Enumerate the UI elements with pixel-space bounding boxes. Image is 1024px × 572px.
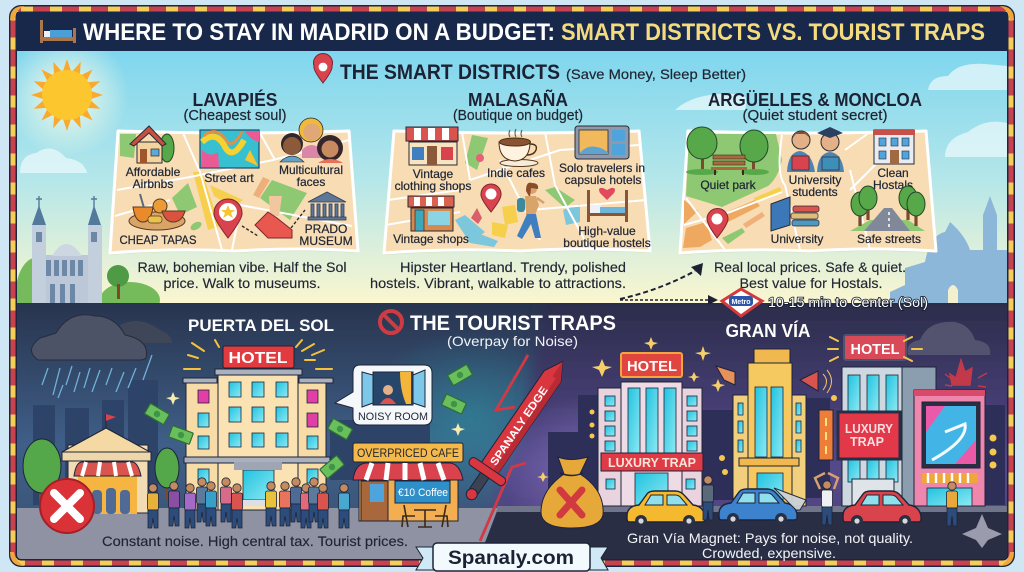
- label: Safe streets: [857, 232, 921, 246]
- label: faces: [297, 175, 325, 189]
- icon: metro sign: Metro: [731, 299, 751, 306]
- label: boutique hostels: [563, 236, 651, 250]
- district: Puerta del Sol: [23, 315, 473, 549]
- building: yellow tower: [733, 349, 806, 506]
- description: Raw, bohemian vibe. Half the Sol: [138, 259, 346, 275]
- clouds: [20, 64, 1007, 173]
- icon: books: [771, 197, 819, 231]
- icon: vintage shop: [408, 196, 454, 231]
- label: University: [789, 173, 841, 187]
- skyline, right: [890, 196, 1007, 304]
- hills and trees, left: [16, 257, 160, 327]
- icon: sneaker: [255, 196, 292, 238]
- price board: [395, 481, 450, 503]
- icon: prohibited: [380, 311, 402, 333]
- sparkles: [166, 392, 465, 436]
- hands-on-head arms: [815, 473, 838, 489]
- sign glare: [184, 340, 332, 369]
- icon: capsule hotel: [575, 126, 629, 159]
- icon: hotel: [183, 369, 333, 510]
- label: High-value: [578, 224, 636, 238]
- arrow: [291, 210, 305, 228]
- building: museum: [62, 414, 151, 514]
- description: hostels. Vibrant, walkable to attractions.: [370, 275, 626, 291]
- icon: metro sign: [722, 289, 762, 316]
- icon: house: [130, 126, 174, 163]
- luxury trap board: [838, 412, 900, 459]
- arrow to Arguelles: [620, 263, 703, 299]
- heading subtitle: (Overpay for Noise): [447, 333, 578, 349]
- label: Vintage shops: [393, 232, 469, 246]
- icon: clean hostal: [873, 130, 915, 164]
- skyline, Sol: [33, 380, 430, 508]
- icon: map pin: [314, 53, 332, 83]
- district name: GRAN VÍA: [726, 320, 810, 341]
- hotel sign: left: HOTEL: [627, 358, 677, 375]
- street, Sol: [16, 508, 498, 561]
- label: Airbnbs: [133, 177, 173, 191]
- icon: walker: [517, 183, 544, 239]
- sign glare: [828, 337, 922, 361]
- sparkles: [537, 337, 725, 482]
- map: Lavapies: [110, 131, 358, 255]
- overpriced cafe: [353, 443, 463, 527]
- title highlight: SMART DISTRICTS VS. TOURIST TRAPS: [561, 19, 985, 46]
- section heading: tourist traps: [380, 311, 616, 349]
- people: [702, 476, 958, 526]
- label: capsule hotels: [565, 173, 641, 187]
- divider: red lightning: [480, 355, 528, 541]
- building: gray hotel: [842, 367, 936, 506]
- icon: horn right: [800, 370, 832, 393]
- label: Indie cafes: [487, 166, 545, 180]
- hotel sign: right: HOTEL: [850, 341, 900, 358]
- building: left hotel: [598, 382, 703, 506]
- label: Affordable: [126, 165, 181, 179]
- cloud: [908, 322, 990, 355]
- cafe sign: [353, 443, 463, 462]
- luxury trap board: TRAP: [850, 434, 884, 449]
- hotel sign: HOTEL: [228, 350, 288, 367]
- icon: horn left: [716, 366, 735, 385]
- map: Malasana: [384, 131, 650, 255]
- cafe table: [402, 505, 448, 527]
- icon: map pin: [481, 184, 501, 212]
- banner: [601, 453, 703, 471]
- label: Vintage: [413, 167, 454, 181]
- travel time: 10-15 min to Center (Sol): [768, 294, 928, 310]
- icon: bed: [40, 20, 76, 43]
- label: clothing shops: [395, 179, 471, 193]
- skyline, Gran Via: [548, 395, 1005, 505]
- footer banner: Spanaly.com: [416, 543, 608, 571]
- district tagline: (Boutique on budget): [453, 108, 583, 124]
- tree: [155, 448, 179, 500]
- hotel sign: left: [621, 353, 682, 377]
- label: Street art: [204, 171, 254, 185]
- icon: sword: [451, 350, 580, 511]
- arrow: [242, 226, 258, 236]
- luxury trap board: LUXURY: [845, 421, 893, 436]
- icon: boutique bed: [587, 188, 628, 222]
- building: pink screen: [914, 390, 985, 506]
- label: University: [771, 232, 823, 246]
- hotel sign: right: [844, 335, 906, 360]
- label: Multicultural: [279, 163, 343, 177]
- panel: tourist traps: [17, 303, 1007, 559]
- burst: [945, 360, 987, 387]
- heading text: THE SMART DISTRICTS: [340, 61, 560, 84]
- lights: [590, 395, 996, 475]
- overpriced cafe: OVERPRICED CAFE: [357, 448, 459, 460]
- description: price. Walk to museums.: [164, 275, 320, 291]
- overpriced cafe: €10 Coffee: [398, 487, 448, 499]
- metro connection: [620, 263, 928, 316]
- district tagline: (Quiet student secret): [742, 108, 888, 124]
- icon: coffee cup: [499, 129, 538, 166]
- flying money: [144, 364, 473, 479]
- label: students: [792, 185, 838, 199]
- description: Real local prices. Safe & quiet.: [714, 259, 906, 275]
- district: Arguelles and Moncloa: [680, 90, 936, 291]
- lit marquee: [819, 410, 833, 460]
- label: CHEAP TAPAS: [120, 233, 196, 247]
- heading text: THE TOURIST TRAPS: [410, 312, 616, 335]
- hotel sign: [223, 346, 294, 368]
- icon: map pin: [707, 208, 728, 238]
- icon: trumpet: [774, 488, 806, 510]
- icon: red cross badge: [40, 479, 94, 533]
- description: Gran Vía Magnet: Pays for noise, not quality.: [627, 530, 913, 546]
- icon: star pin: [214, 199, 242, 238]
- description: Hipster Heartland. Trendy, polished: [400, 259, 626, 275]
- arrow to metro: [620, 295, 718, 305]
- icon: safe street: [850, 186, 925, 231]
- icon: street art: [200, 130, 259, 168]
- label: Clean: [877, 166, 909, 180]
- crowd: [148, 478, 350, 528]
- icon: museum: [308, 192, 346, 220]
- icon: faces: [280, 118, 343, 163]
- icon: storm cloud: [31, 315, 172, 360]
- street, Gran Via: [478, 512, 1008, 561]
- district: Gran Via: [537, 320, 1002, 561]
- header bar: [16, 12, 1008, 51]
- label: Solo travelers in: [559, 161, 645, 175]
- label: PRADO: [305, 222, 347, 236]
- label: NOISY ROOM: [358, 411, 428, 423]
- description: Crowded, expensive.: [702, 545, 836, 561]
- icon: money bag: [541, 457, 603, 528]
- district: Lavapies: [110, 89, 358, 291]
- cars: [627, 489, 921, 527]
- icon: cathedral: [32, 196, 102, 304]
- label: MUSEUM: [299, 234, 353, 248]
- section heading: smart districts: [314, 53, 746, 84]
- description: Constant noise. High central tax. Tourist prices.: [102, 533, 408, 549]
- building: left hotel: LUXURY TRAP: [608, 456, 696, 470]
- icon: sword: SPANALY EDGE: [488, 385, 551, 468]
- noisy room bubble: [335, 365, 432, 425]
- footer banner: Spanaly.com: Spanaly.com: [448, 548, 574, 569]
- map: Arguelles: [680, 131, 936, 255]
- rain: [42, 355, 152, 398]
- district name: MALASAÑA: [468, 89, 568, 110]
- district name: LAVAPIÉS: [192, 89, 278, 110]
- district name: ARGÜELLES & MONCLOA: [708, 90, 922, 110]
- heading subtitle: (Save Money, Sleep Better): [566, 66, 746, 82]
- panel: smart districts: [5, 33, 1008, 327]
- icon: clothing shop: [406, 127, 458, 165]
- description: Best value for Hostals.: [740, 275, 882, 291]
- district: Malasana: [370, 89, 651, 291]
- icon: students: [787, 127, 844, 172]
- district tagline: (Cheapest soul): [184, 108, 286, 124]
- tree: [23, 439, 61, 502]
- icon: tapas: [129, 194, 185, 230]
- icon: park trees and bench: [686, 127, 769, 175]
- title: WHERE TO STAY IN MADRID ON A BUDGET:: [83, 19, 555, 46]
- district name: PUERTA DEL SOL: [188, 316, 334, 335]
- label: Quiet park: [700, 178, 757, 192]
- label: Hostals: [873, 178, 913, 192]
- decorative star: [962, 514, 1002, 548]
- icon: sun: [5, 33, 129, 157]
